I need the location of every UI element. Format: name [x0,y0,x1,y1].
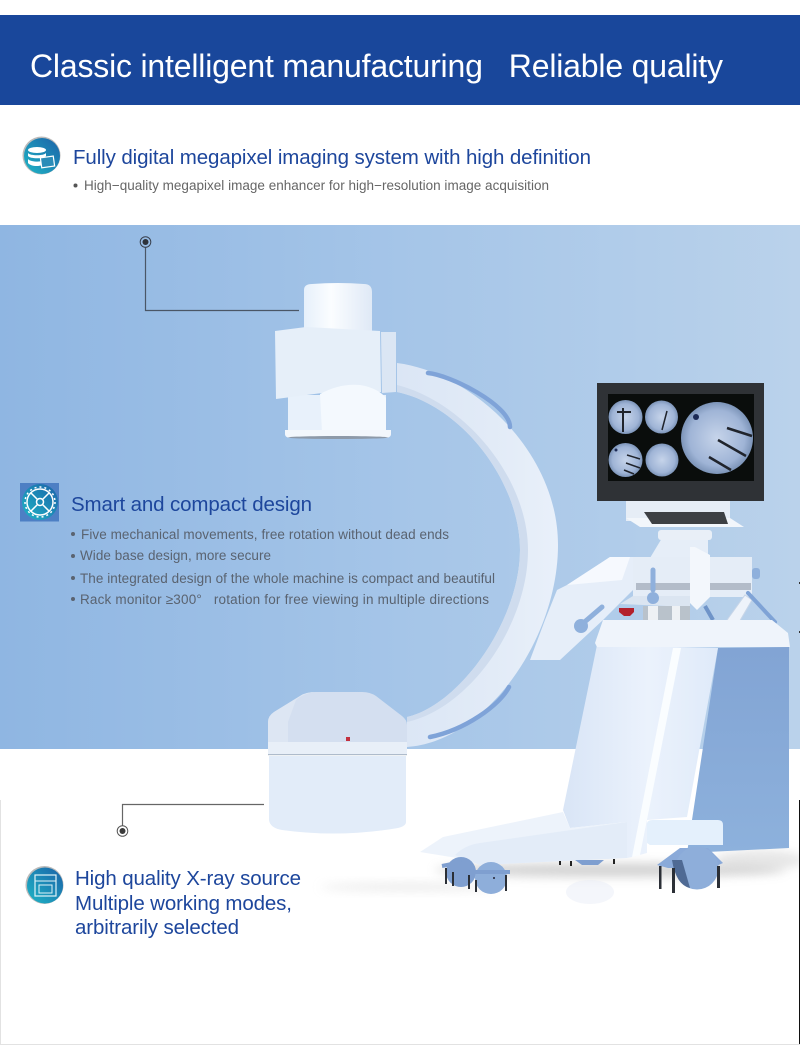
heading: Fully digital megapixel imaging system with high definition [73,146,591,169]
floor shadow [320,850,800,904]
monitor X-ray images [608,400,753,477]
heading lines: High quality X-ray source [75,867,301,890]
wheels [442,846,723,894]
section: smart and compact design [20,483,495,607]
image intensifier [275,283,396,439]
icon: waveform screen [26,866,64,904]
leader line: X-ray source [117,804,264,836]
support arm [530,557,633,660]
bullet list: The integrated design of the whole machine is compact and beautiful [80,571,495,586]
C-arm arc [397,363,558,747]
X-ray source box [268,692,407,834]
crossbar and rotary column [619,538,775,624]
header banner [0,15,800,105]
arm handle [574,607,602,633]
bullet list [71,527,495,607]
bullet list: Rack monitor ≥300° rotation for free viewing in multiple directions [80,592,489,607]
section: X-ray source [26,866,301,939]
icon: gear [20,483,59,522]
heading: Smart and compact design [71,493,312,516]
main column and foot [420,620,790,865]
bullet list: Wide base design, more secure [80,548,271,563]
heading lines [75,867,301,939]
C-arm machine [268,283,790,894]
section: digital imaging [22,136,591,193]
leader line: image intensifier [140,237,299,310]
bullet list: Five mechanical movements, free rotation without dead ends [81,527,449,542]
heading lines: Multiple working modes, [75,892,292,915]
icon: database and images [22,136,60,174]
blue background panel [0,225,800,749]
title: Classic intelligent manufacturing Reliable quality [30,48,723,84]
monitor [597,383,764,540]
heading lines: arbitrarily selected [75,916,239,939]
bullet text: High−quality megapixel image enhancer for high−resolution image acquisition [84,178,549,193]
